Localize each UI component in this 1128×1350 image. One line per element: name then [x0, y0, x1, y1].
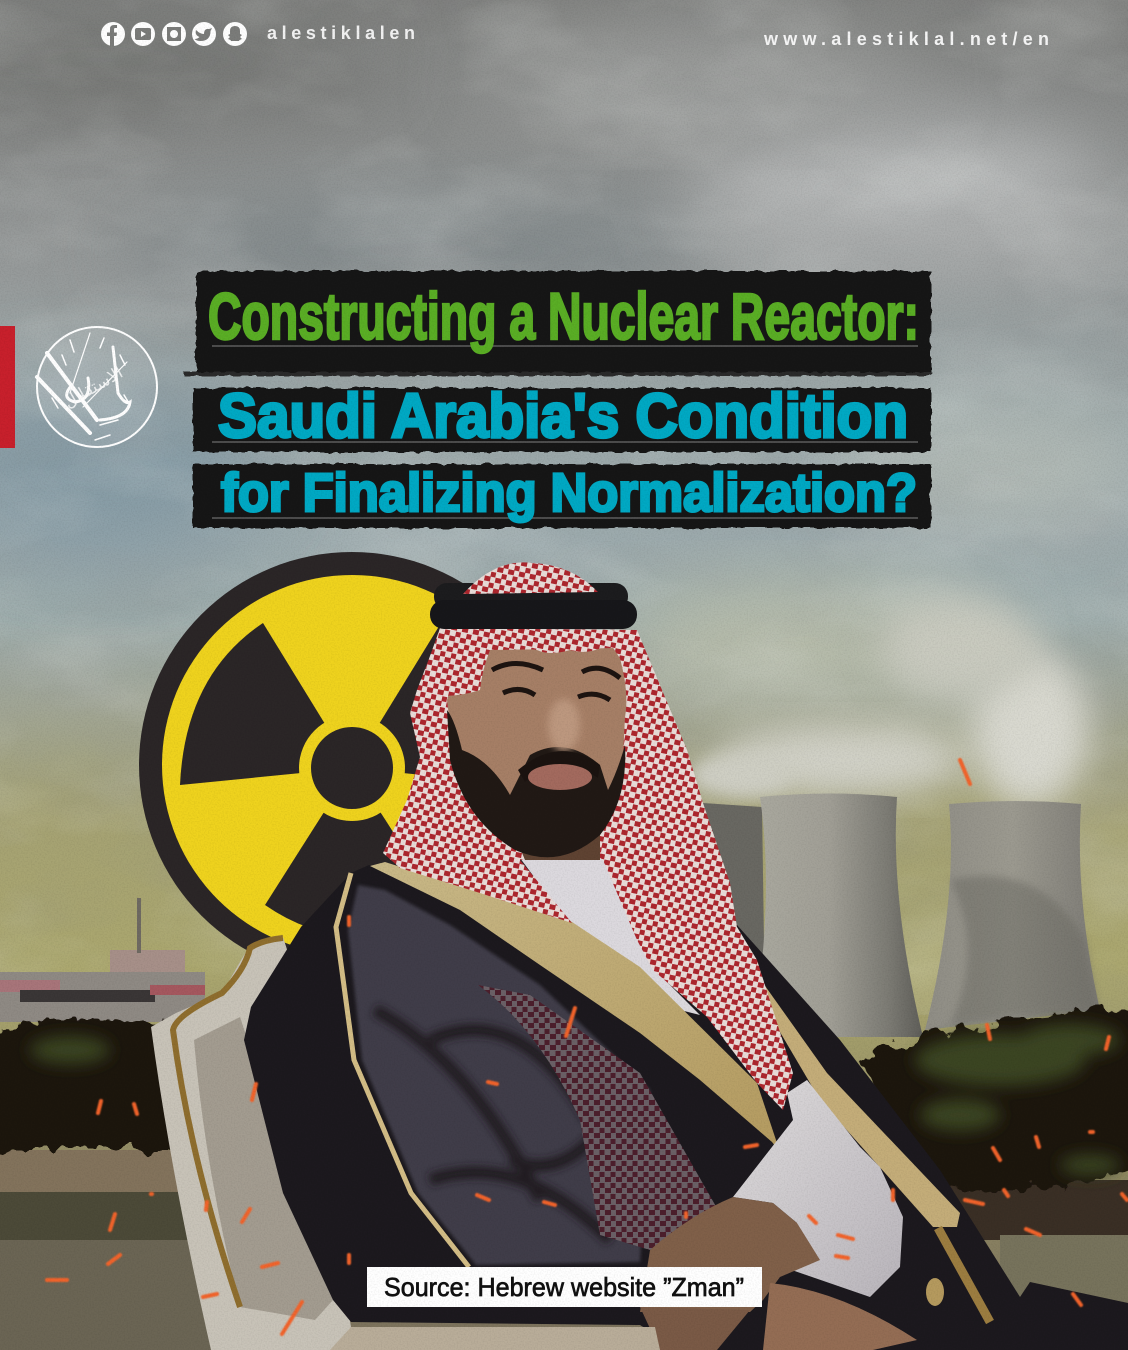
- title banner 1: [184, 271, 932, 376]
- burning embers: [47, 760, 1127, 1334]
- title line 2: Saudi Arabia's Condition: [218, 382, 908, 451]
- radiation hub: [311, 727, 393, 809]
- lower hand: [763, 1283, 917, 1350]
- agal upper: [434, 583, 628, 610]
- title line 3: for Finalizing Normalization?: [221, 463, 917, 523]
- gold trim right: [763, 983, 960, 1227]
- robe patterned band: [478, 985, 718, 1250]
- title banner 3: [193, 463, 931, 528]
- white cuff: [733, 1080, 903, 1297]
- upper hand fingers: [640, 1307, 750, 1350]
- face: [447, 648, 626, 857]
- ground fields: [0, 1150, 1128, 1350]
- headscarf: [383, 630, 793, 1110]
- lips: [528, 764, 592, 790]
- red accent bar: [0, 326, 15, 448]
- beard: [447, 710, 625, 857]
- neck shadow: [500, 800, 600, 860]
- gold trim left piping: [336, 873, 469, 1267]
- icon glyph details: [107, 25, 242, 46]
- tower centre: [752, 794, 923, 1037]
- robe folds: [375, 1010, 610, 1240]
- chair cushion: [194, 1017, 333, 1320]
- forehead flap: [417, 628, 680, 745]
- source label: Source: Hebrew website ”Zman”: [384, 1272, 744, 1302]
- nose highlight: [548, 699, 580, 751]
- tassel: [926, 1278, 944, 1306]
- cooling towers: [700, 794, 1100, 1037]
- eyebrows and eyes: [492, 664, 620, 700]
- headscarf dome: [463, 562, 598, 594]
- tower right: [925, 801, 1100, 1030]
- white thobe neck: [520, 852, 700, 1015]
- chair frame: [151, 937, 351, 1350]
- gold trim centre: [370, 862, 780, 1152]
- chair seat: [330, 1327, 660, 1350]
- logo: calligraphy seal: الاستقلال: [58, 358, 127, 413]
- man: robe: [244, 852, 1128, 1350]
- agal lower: [430, 600, 637, 629]
- tree lines: [0, 1010, 1128, 1188]
- logo: calligraphy seal: [37, 327, 157, 447]
- man: head: [383, 562, 793, 1110]
- chair gold edge: [173, 938, 283, 1307]
- tower left: [700, 803, 765, 1010]
- radiation blades: [180, 623, 524, 935]
- title banner 2: [193, 382, 931, 452]
- website url: www.alestiklal.net/en: [763, 29, 1049, 49]
- radiation ring: [299, 715, 405, 821]
- distant buildings: [0, 898, 205, 1022]
- smoke plumes: [690, 600, 1090, 810]
- moustache: [518, 751, 600, 782]
- social handle: alestiklalen: [267, 23, 415, 43]
- gold trim tail: [938, 1228, 990, 1322]
- robe lighter fabric: [348, 885, 650, 1265]
- chair: [151, 937, 351, 1350]
- top left social icons: [101, 22, 247, 46]
- nuclear radiation symbol: [139, 552, 565, 978]
- forearm: [640, 1197, 820, 1312]
- green tree highlights: [30, 1024, 1120, 1175]
